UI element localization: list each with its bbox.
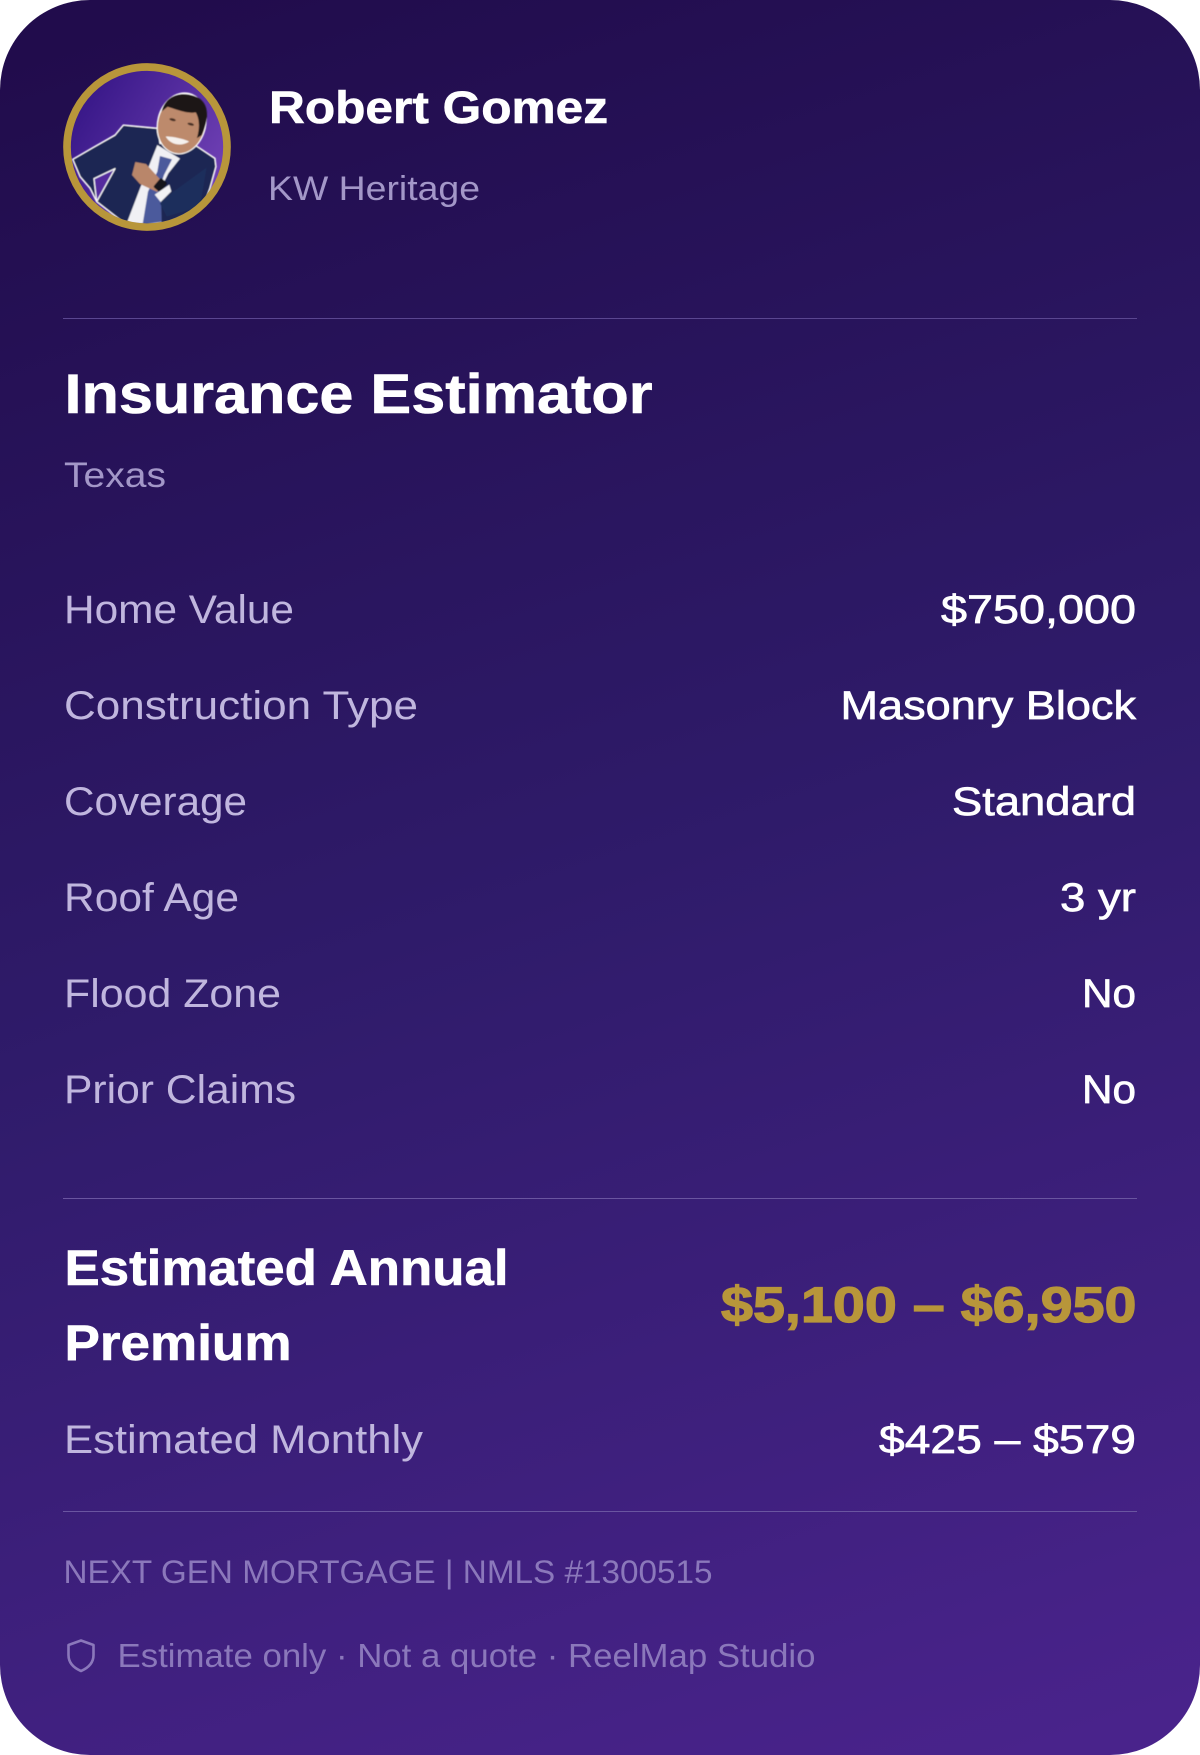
row: flood zone: Flood Zone xyxy=(64,972,281,1016)
label: estimated annual premium: Premium xyxy=(64,1315,292,1371)
icon: shield xyxy=(68,1640,94,1671)
title: Insurance Estimator xyxy=(64,362,652,425)
row: coverage: Standard xyxy=(952,780,1136,824)
row: roof age xyxy=(64,876,1136,920)
subtitle: state: Texas xyxy=(64,456,166,495)
row: estimated monthly: Estimated Monthly xyxy=(64,1418,423,1462)
panel: estimate results xyxy=(64,1240,1136,1462)
disclaimer text: Estimate only · Not a quote · ReelMap Studio xyxy=(118,1637,816,1674)
row: coverage xyxy=(64,780,1136,824)
footer: disclaimer xyxy=(68,1637,816,1674)
agent name: Robert Gomez xyxy=(269,82,608,133)
row: prior claims: No xyxy=(1082,1068,1136,1112)
value: annual premium range: $5,100 – $6,950 xyxy=(721,1277,1136,1333)
label: estimated annual premium: Estimated Annual xyxy=(64,1240,508,1296)
row: construction type: Masonry Block xyxy=(840,684,1137,728)
row: home value: Home Value xyxy=(64,588,294,632)
footer: lender line: NEXT GEN MORTGAGE | NMLS #1300515 xyxy=(64,1554,712,1590)
row: home value xyxy=(64,588,1136,632)
header: agent profile xyxy=(67,67,608,227)
row: prior claims: Prior Claims xyxy=(64,1068,296,1112)
row: construction type xyxy=(64,684,1137,728)
row: estimated monthly xyxy=(64,1418,1136,1462)
row: roof age: 3 yr xyxy=(1060,876,1136,920)
label: estimated annual premium xyxy=(64,1240,508,1371)
row: home value: $750,000 xyxy=(941,588,1136,632)
icon: agent avatar portrait xyxy=(67,67,227,227)
row: coverage: Coverage xyxy=(64,780,247,824)
row: prior claims xyxy=(64,1068,1136,1112)
row: estimated monthly: $425 – $579 xyxy=(879,1418,1136,1462)
row: construction type: Construction Type xyxy=(64,684,418,728)
row: flood zone xyxy=(64,972,1136,1016)
row: flood zone: No xyxy=(1082,972,1136,1016)
agent brokerage: KW Heritage xyxy=(268,170,480,208)
row: roof age: Roof Age xyxy=(64,876,239,920)
panel: input details xyxy=(64,588,1137,1112)
